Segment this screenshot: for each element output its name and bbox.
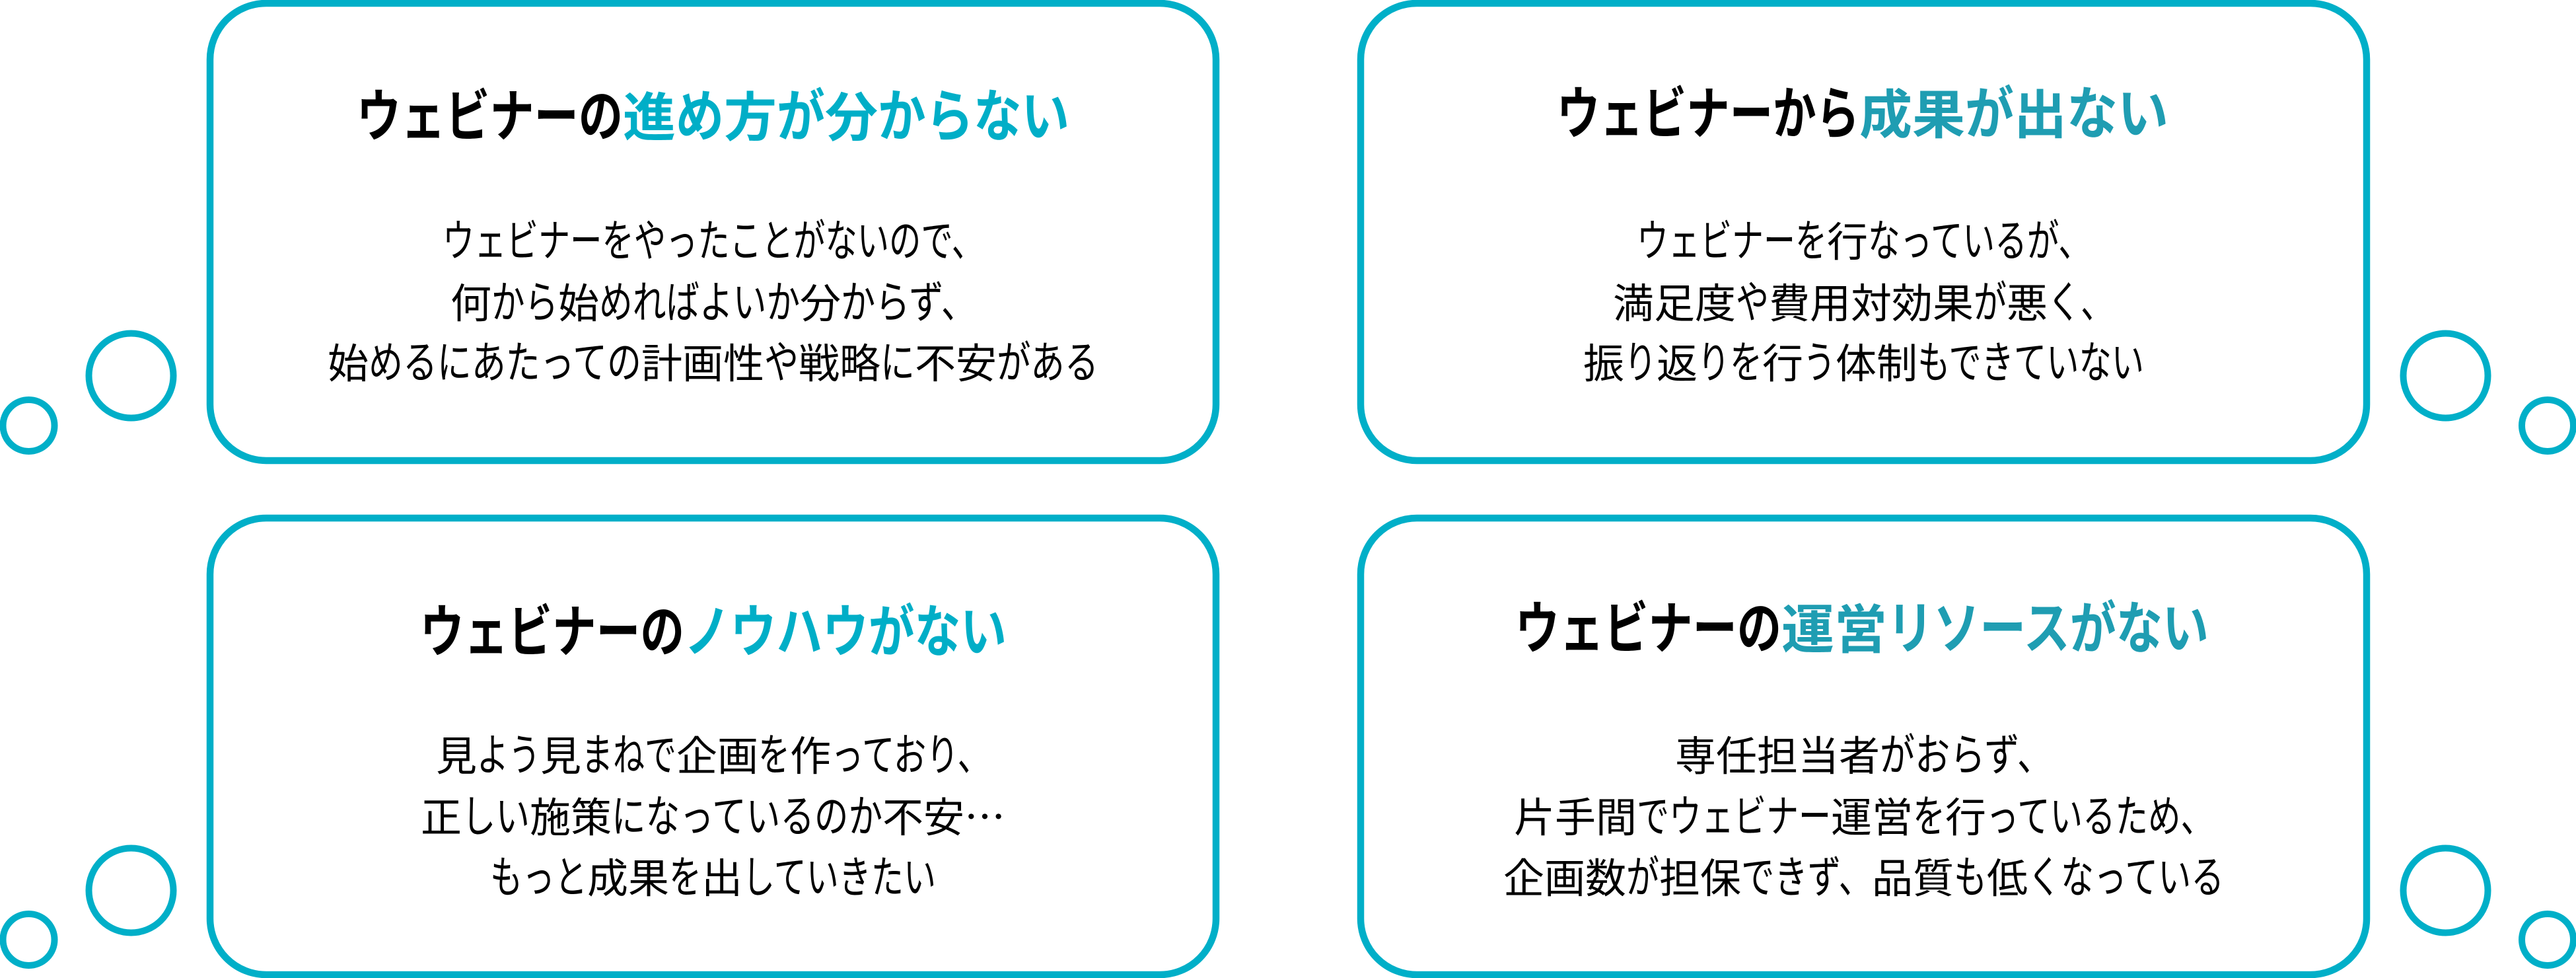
bubble: small (2522, 914, 2573, 965)
body text: 満足度や費用対効果が悪く、 (1613, 278, 2114, 328)
panel frame (210, 518, 1216, 975)
body text (328, 217, 1098, 388)
bubble: large (89, 848, 173, 933)
body text: もっと成果を出していきたい (490, 853, 936, 903)
bubble: large (2403, 848, 2487, 933)
body text: 専任担当者がおらず、 (1675, 731, 2052, 780)
body text: ウェビナーをやったことがないので、 (443, 217, 984, 266)
body text: 正しい施策になっているのか不安… (421, 784, 1005, 844)
panel: webinar operating resources missing (1361, 518, 2573, 975)
bubble: large (89, 333, 173, 418)
heading: ウェビナーのノウハウがない (420, 601, 1007, 664)
body text: 振り返りを行う体制もできていない (1583, 338, 2144, 388)
bubble: large (2403, 333, 2487, 418)
body text (1503, 731, 2224, 903)
heading: ウェビナーの運営リソースがない (1515, 597, 2209, 661)
body text (1583, 217, 2144, 388)
heading: ウェビナーから成果が出ない (1557, 83, 2168, 146)
body text: 企画数が担保できず、品質も低くなっている (1503, 853, 2224, 903)
panel: webinar process unknown (3, 3, 1216, 461)
bubble: small (3, 914, 54, 965)
body text: 片手間でウェビナー運営を行っているため、 (1514, 792, 2213, 842)
body text: ウェビナーを行なっているが、 (1637, 217, 2091, 266)
body text: 何から始めればよいか分からず、 (450, 278, 976, 328)
panel: webinar know-how missing (3, 518, 1216, 975)
panel frame (1361, 3, 2367, 461)
body text (421, 731, 1005, 903)
bubble: small (2522, 400, 2573, 451)
body text: 始めるにあたっての計画性や戦略に不安がある (328, 338, 1098, 388)
heading: ウェビナーの進め方が分からない (357, 85, 1069, 149)
panel frame (1361, 518, 2367, 975)
panel: webinar results missing (1361, 3, 2573, 461)
panel frame (210, 3, 1216, 461)
bubble: small (3, 400, 54, 451)
body text: 見よう見まねで企画を作っており、 (436, 731, 990, 780)
